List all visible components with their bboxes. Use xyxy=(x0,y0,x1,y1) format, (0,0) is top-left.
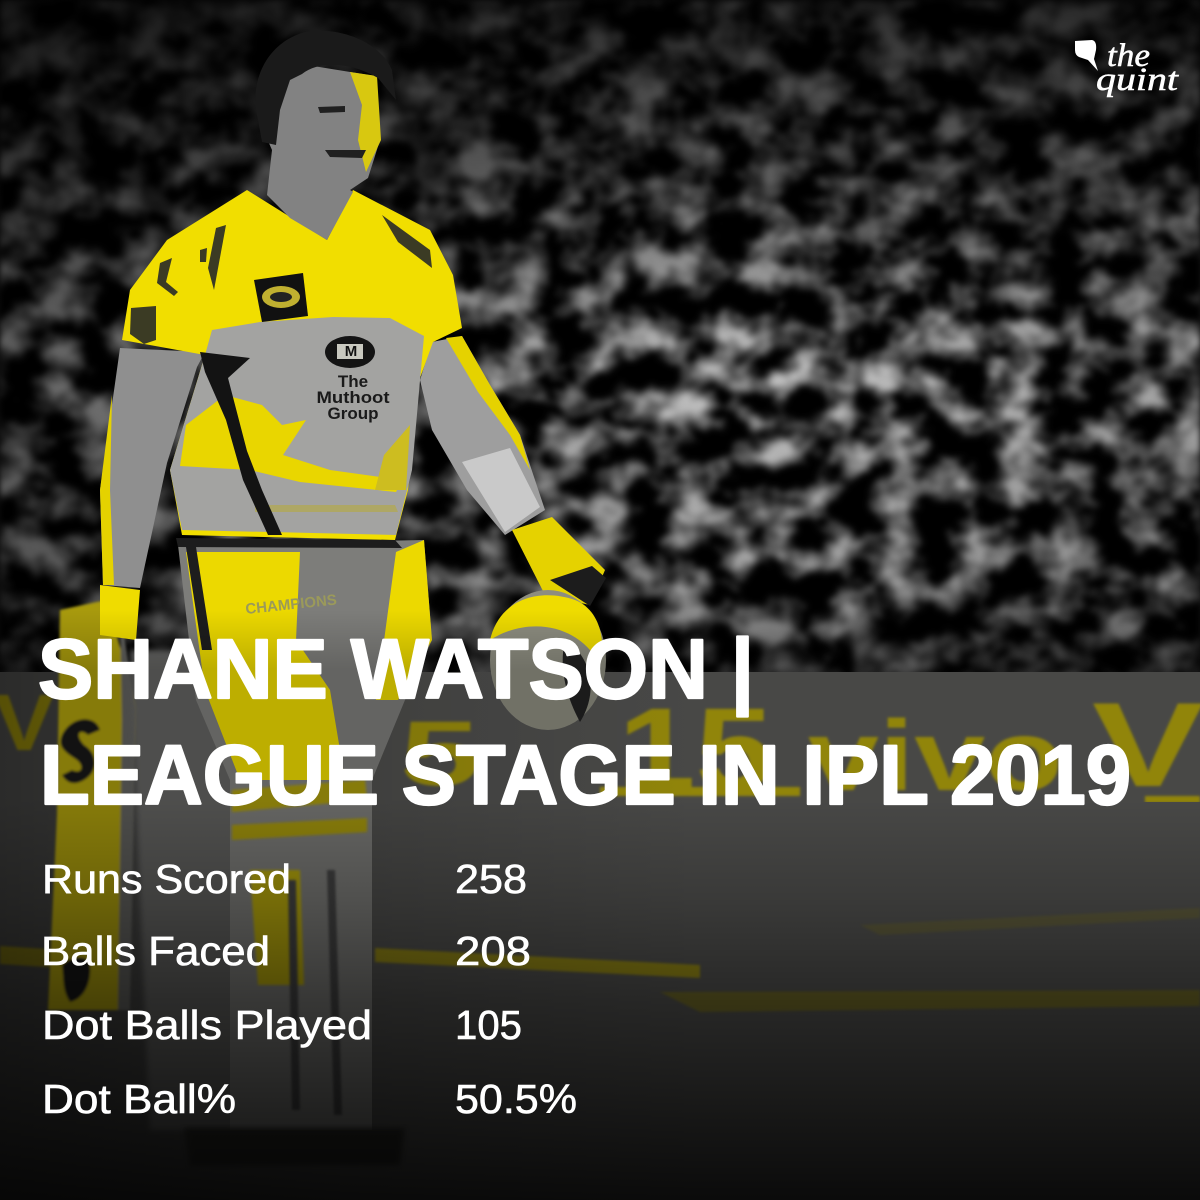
eyes and mouth xyxy=(318,106,366,158)
jersey sponsor: The Muthoot Group: M xyxy=(345,343,357,360)
trailing leg xyxy=(130,650,240,1130)
pad yellow streaks xyxy=(250,870,304,985)
bat xyxy=(48,600,138,1010)
background: advertising boards: 15 xyxy=(618,684,773,816)
row: dot ball percentage: Dot Ball% xyxy=(42,1076,236,1122)
thigh yellow xyxy=(186,540,432,780)
background: advertising boards: 5 xyxy=(400,703,480,805)
row: balls faced: 208 xyxy=(455,928,531,974)
left glove xyxy=(100,585,140,640)
background: cricket ground xyxy=(0,672,1200,1200)
neck and face xyxy=(258,66,380,240)
logo: The Quint xyxy=(1075,38,1179,98)
right arm xyxy=(420,336,545,535)
jersey sponsor: The Muthoot Group xyxy=(316,336,390,423)
row: runs scored: 258 xyxy=(455,856,527,902)
logo wordmark: the xyxy=(1107,38,1150,74)
lower darkening overlay xyxy=(0,610,1200,1200)
front leg and pads xyxy=(178,540,432,1130)
jersey sponsor badge xyxy=(254,273,308,322)
jersey black side stripe xyxy=(200,352,282,535)
row: dot balls played: 105 xyxy=(455,1002,522,1048)
background: stadium crowd xyxy=(0,0,1200,680)
boots xyxy=(184,1128,405,1166)
background: advertising boards xyxy=(0,672,1200,816)
row: dot ball percentage xyxy=(42,1076,577,1122)
background: advertising boards: vivo xyxy=(808,700,1063,812)
title: SHANE WATSON | xyxy=(38,622,754,717)
jersey sponsor: The Muthoot Group: The xyxy=(338,372,368,391)
icon: speech bubble xyxy=(1075,40,1098,71)
right glove xyxy=(512,517,605,605)
jersey grey chest xyxy=(170,317,424,535)
row: balls faced: Balls Faced xyxy=(41,928,270,974)
title xyxy=(38,622,1131,822)
helmet xyxy=(490,590,606,730)
row: dot balls played xyxy=(42,1002,522,1048)
logo wordmark xyxy=(1096,38,1179,98)
row: dot ball percentage: 50.5% xyxy=(455,1076,577,1122)
jersey sponsor: The Muthoot Group: Muthoot xyxy=(316,388,390,407)
pants lettering: CHAMPIONS xyxy=(245,591,338,618)
jersey collar marks xyxy=(130,215,432,344)
pad ridges xyxy=(288,870,342,1115)
row: runs scored: Runs Scored xyxy=(42,856,291,902)
background: advertising boards: V xyxy=(1092,678,1200,812)
title: LEAGUE STAGE IN IPL 2019 xyxy=(40,728,1131,822)
jersey yellow streaks xyxy=(180,395,402,492)
logo wordmark: quint xyxy=(1096,62,1179,98)
row: balls faced xyxy=(41,928,531,974)
face highlight xyxy=(350,72,381,172)
player: Shane Watson xyxy=(48,31,606,1166)
waist shadow xyxy=(176,538,402,548)
stats table xyxy=(41,856,577,1122)
row: runs scored xyxy=(42,856,527,902)
wrist band xyxy=(462,448,540,532)
left arm xyxy=(100,348,205,588)
hair xyxy=(255,31,396,145)
jersey sponsor: The Muthoot Group: Group xyxy=(328,404,378,423)
row: dot balls played: Dot Balls Played xyxy=(42,1002,372,1048)
jersey xyxy=(122,190,462,540)
